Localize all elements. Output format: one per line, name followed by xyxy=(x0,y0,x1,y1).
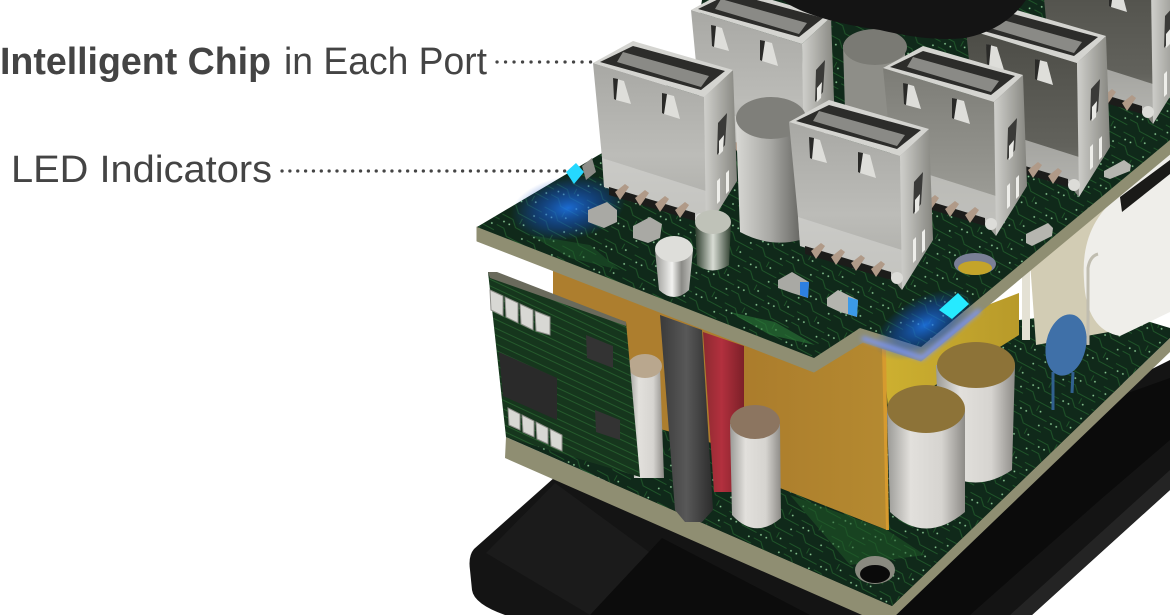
small capacitor xyxy=(730,405,781,528)
insulating panels xyxy=(553,270,1030,530)
LED right xyxy=(939,293,969,319)
USB port front center xyxy=(789,100,933,290)
rear large capacitor xyxy=(936,342,1015,482)
mounting hole xyxy=(855,556,895,584)
leader line: LED indicators xyxy=(282,169,566,173)
blue edge light xyxy=(862,310,980,358)
top circuit board xyxy=(477,0,1170,376)
LED left xyxy=(566,158,596,184)
blue glow right xyxy=(863,274,987,376)
black tube xyxy=(660,315,713,522)
USB port front left xyxy=(593,41,737,231)
lower contacts xyxy=(508,408,562,451)
USB port far right xyxy=(1040,0,1170,124)
silver capacitor xyxy=(655,236,693,297)
chip upper xyxy=(586,335,613,368)
USB port mid right xyxy=(883,46,1027,236)
tall capacitor xyxy=(736,97,806,243)
front large capacitor xyxy=(887,385,965,528)
black plug xyxy=(782,0,1026,39)
label: intelligent chip: Intelligent Chip xyxy=(0,41,271,83)
daughter board xyxy=(488,272,640,477)
label: intelligent chip xyxy=(0,41,487,83)
label: intelligent chip: in Each Port xyxy=(284,41,487,83)
USB port back right xyxy=(966,7,1110,197)
upper contacts xyxy=(490,290,550,335)
leader line: intelligent chip xyxy=(497,60,592,64)
electrolytic capacitor rear xyxy=(843,29,907,120)
rear white capacitor and beige insulator xyxy=(1030,150,1170,345)
label: LED indicators: LED Indicators xyxy=(11,149,272,191)
screw hole xyxy=(954,253,996,275)
blue varistor xyxy=(1040,311,1092,410)
red tube xyxy=(703,332,744,492)
tall capacitor behind daughter board xyxy=(628,354,664,478)
blue glow left xyxy=(505,166,631,250)
dark chrome capacitor xyxy=(695,210,731,270)
chip lower xyxy=(595,410,620,440)
USB port back left xyxy=(691,0,835,178)
controller chip xyxy=(499,352,557,420)
surface mount components xyxy=(588,160,1131,317)
lower circuit board xyxy=(505,310,1170,615)
black enclosure tray xyxy=(470,360,1170,615)
